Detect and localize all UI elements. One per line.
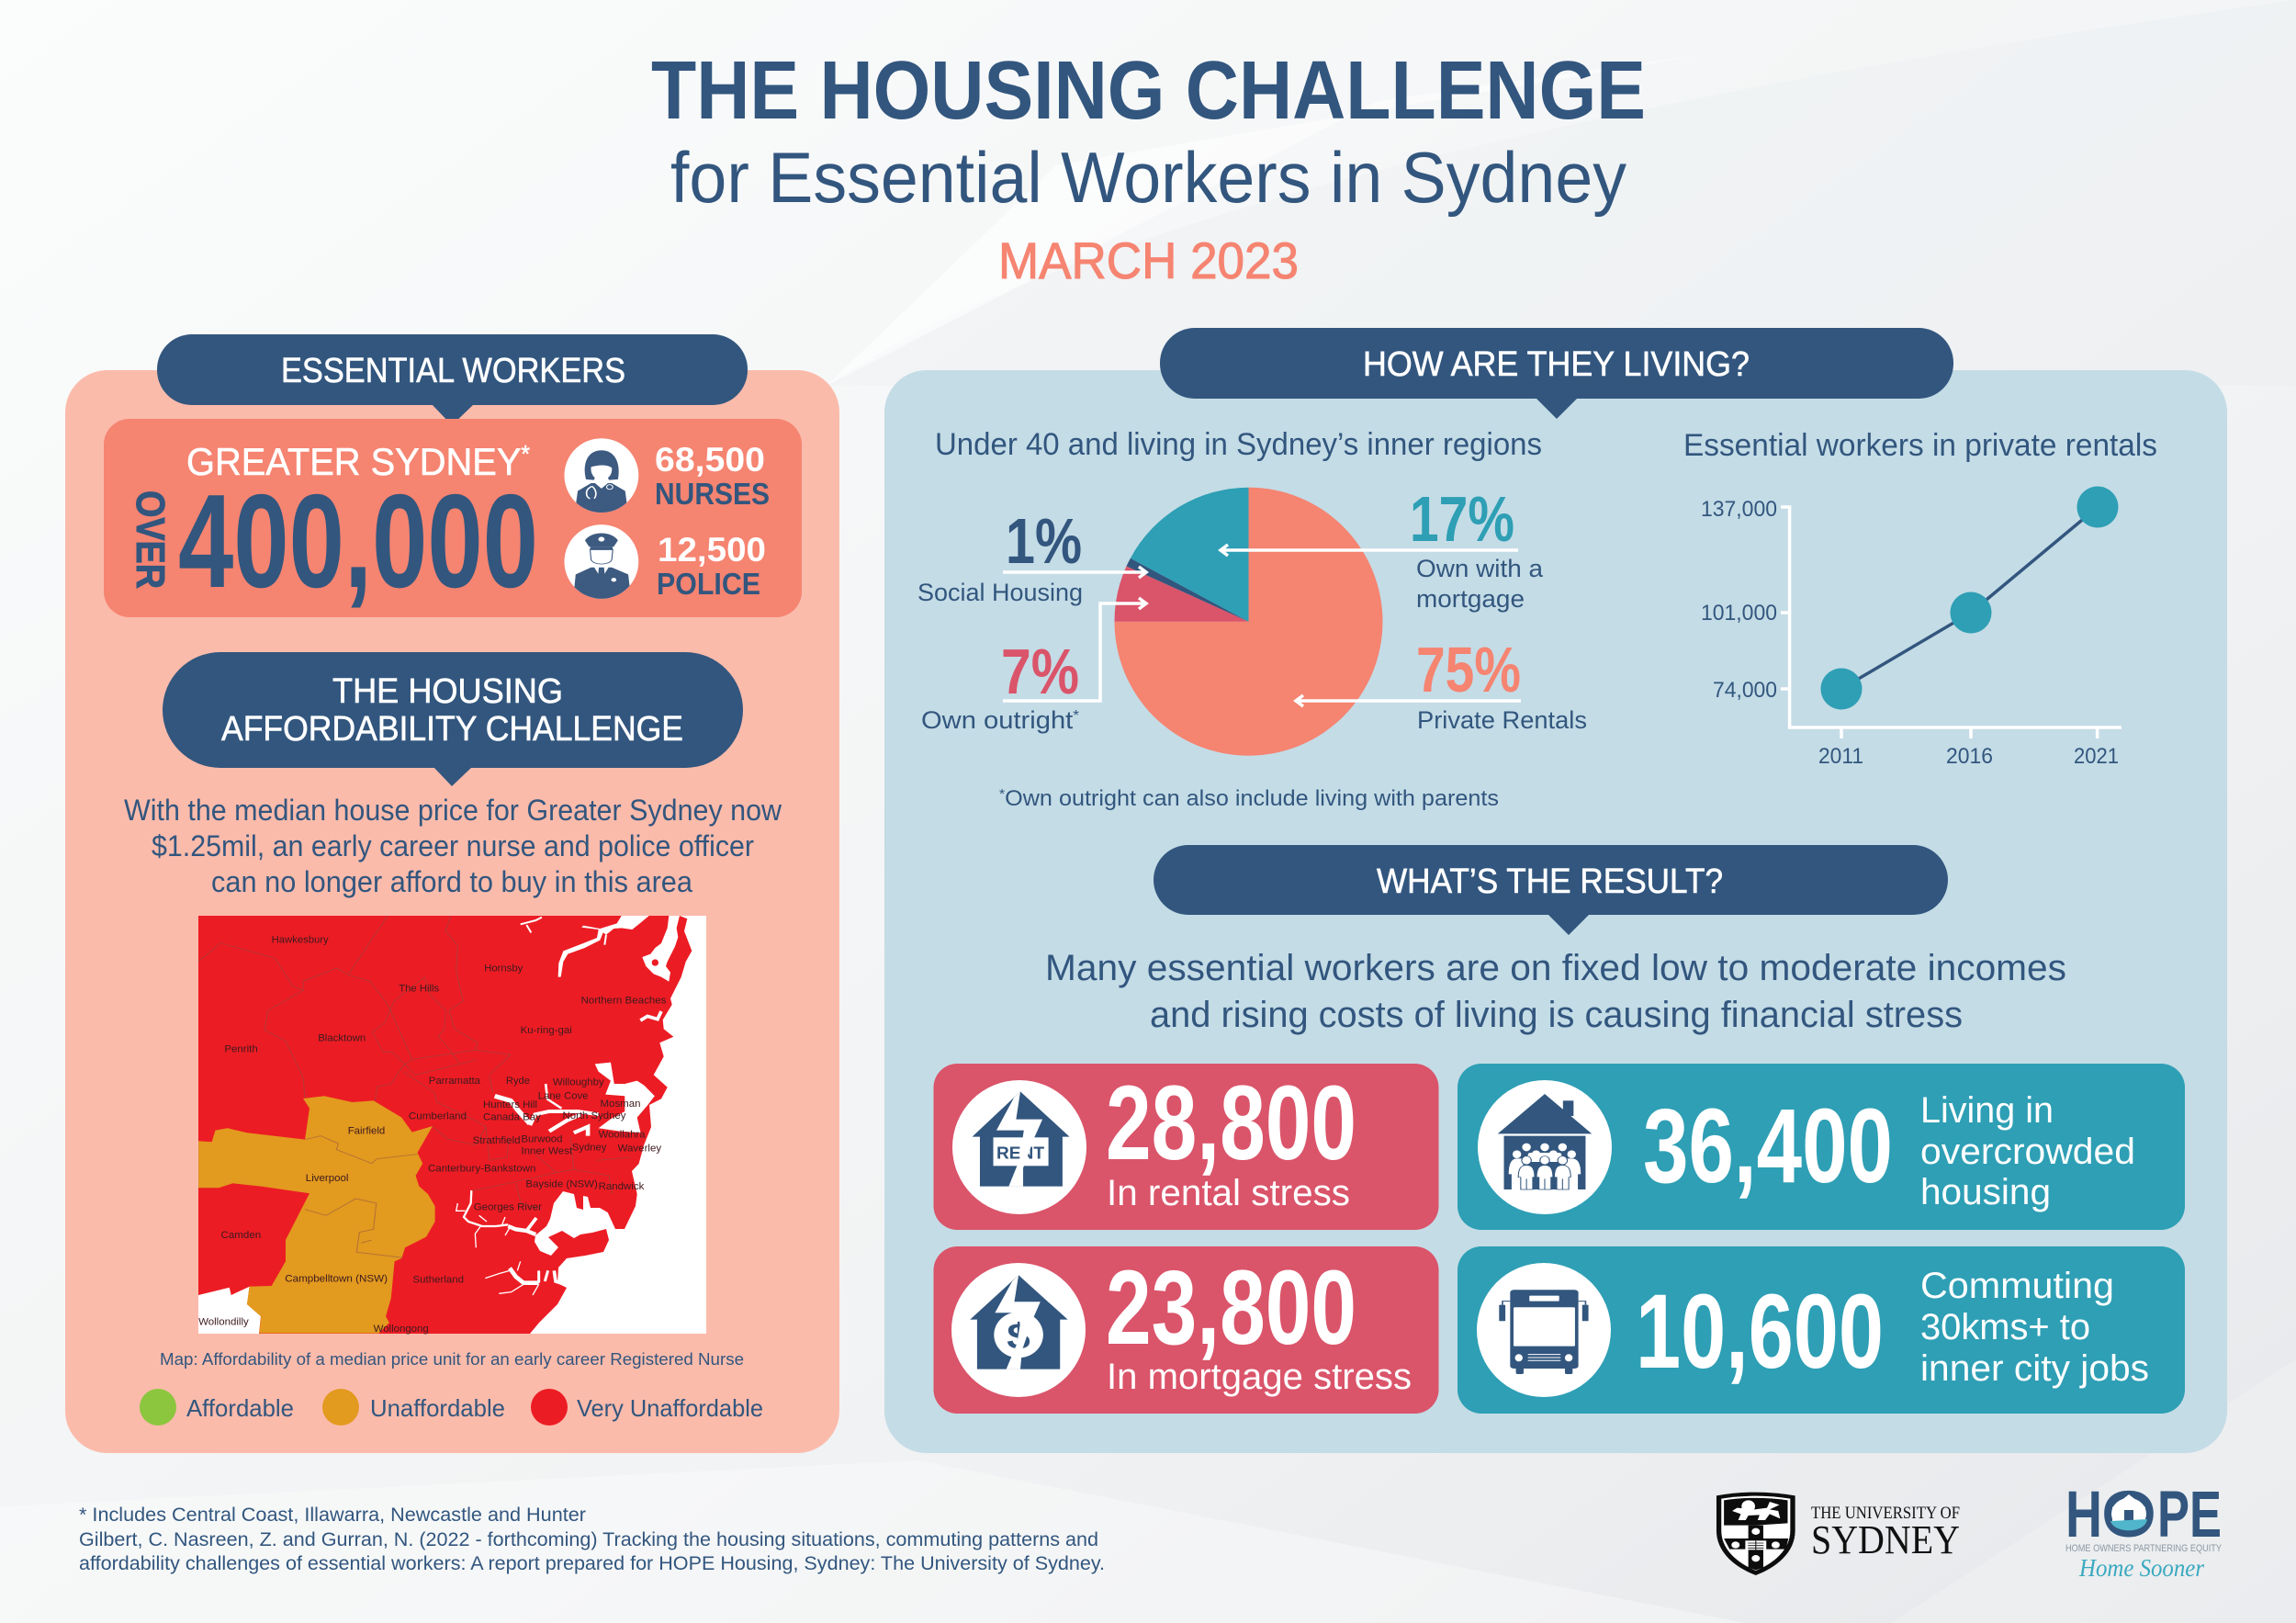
axes: [1781, 507, 2122, 738]
map labels: Penrith: [224, 1043, 258, 1054]
stat box: greater sydney workers: [104, 419, 802, 617]
panel: how are they living and the result: [884, 328, 2227, 1453]
map labels: Camden: [221, 1229, 261, 1241]
map labels: Burwood: [521, 1133, 563, 1144]
big number 400,000: 400,000: [178, 467, 538, 615]
label: 17% own with a mortgage: Own with a: [1416, 555, 1544, 582]
heading: what's the result: [1154, 845, 1948, 935]
text block: median house price: With the median house price for Greater Sydney now: [124, 794, 782, 827]
label: 17% own with a mortgage: [1410, 483, 1544, 613]
footnote: own outright: Own outright can also include living with parents: [1005, 786, 1499, 811]
map labels: Northern Beaches: [580, 994, 667, 1006]
label: commuting: [1920, 1266, 2149, 1389]
legend: affordable: Affordable: [186, 1394, 294, 1422]
nurses count: 68,500: [655, 441, 765, 479]
map labels: Lane Cove: [538, 1089, 589, 1101]
map labels: Canterbury-Bankstown: [428, 1162, 535, 1174]
map labels: Mosman: [600, 1098, 641, 1110]
stat card: overcrowded housing: [1458, 1064, 2185, 1230]
icon: broken rent house: [973, 1091, 1070, 1187]
map labels: Fairfield: [348, 1124, 385, 1136]
legend: affordable: [140, 1389, 294, 1426]
map labels: Parramatta: [429, 1075, 480, 1087]
map: housing affordability by local government area: [198, 916, 706, 1335]
x axis labels: 2021: [2074, 744, 2119, 769]
logo: the university of sydney: SYDNEY: [1811, 1517, 1960, 1562]
label: living in overcrowded housing: overcrowded: [1920, 1132, 2135, 1172]
icon: crowded house: [1498, 1094, 1592, 1189]
number 23,800: 23,800: [1106, 1249, 1356, 1367]
map labels: Wollondilly: [198, 1315, 249, 1327]
number 10,600: 10,600: [1636, 1273, 1884, 1391]
slice: social housing 1%: [1126, 558, 1249, 622]
heading: how are they living: HOW ARE THEY LIVING?: [1363, 345, 1750, 384]
footnote: own outright: *: [999, 786, 1005, 802]
heading: the housing challenge: THE HOUSING CHALLENGE: [651, 45, 1646, 137]
stat card: rental stress: [933, 1064, 1438, 1230]
x axis labels: 2016: [1946, 744, 1993, 769]
chart heading: under 40: Under 40 and living in Sydney’s inner regions: [935, 427, 1542, 462]
legend: unaffordable: [322, 1389, 505, 1426]
text block: median house price: can no longer afford to buy in this area: [211, 865, 692, 898]
map labels: Campbelltown (NSW): [285, 1272, 388, 1284]
map labels: Liverpool: [306, 1172, 348, 1184]
wordmark hope: [2065, 1479, 2222, 1551]
map labels: North Sydney: [563, 1110, 626, 1121]
legend: very unaffordable: Very Unaffordable: [577, 1394, 763, 1422]
map labels: Hawkesbury: [272, 933, 329, 945]
label: 7% own outright: [921, 636, 1079, 734]
label: commuting: inner city jobs: [1920, 1348, 2149, 1389]
label: living in overcrowded housing: housing: [1920, 1172, 2051, 1212]
footnotes and reference: Gilbert, C. Nasreen, Z. and Gurran, N. (2022 - forthcoming) Tracking the housing situations, commuting patterns and: [79, 1529, 1098, 1550]
logo: the university of sydney: [1716, 1493, 1960, 1575]
very unaffordable land: [198, 916, 692, 1334]
map labels: Ryde: [506, 1075, 530, 1087]
panel: essential workers and affordability: [65, 334, 839, 1453]
heading: how are they living: [1160, 328, 1953, 419]
shield: [1716, 1493, 1795, 1575]
chart heading: private rentals: Essential workers in private rentals: [1683, 428, 2157, 463]
stat card: long commutes: [1458, 1246, 2185, 1414]
icon: bus: [1499, 1290, 1589, 1374]
heading: essential workers: [157, 334, 748, 425]
label: living in overcrowded housing: [1920, 1090, 2135, 1212]
label: in mortgage stress: In mortgage stress: [1107, 1357, 1412, 1397]
map labels: Hunters Hill: [483, 1099, 537, 1110]
subheading: for Essential Workers in Sydney: [670, 137, 1626, 218]
wordmark: THE UNIVERSITY OF: [1811, 1504, 1960, 1523]
icon: police officer: [564, 524, 638, 601]
title: [651, 45, 1646, 289]
map labels: Waverley: [618, 1142, 661, 1154]
script: Home Sooner: [2078, 1554, 2204, 1582]
y axis labels: [1701, 497, 1777, 703]
map labels: [198, 933, 667, 1335]
text block: financial stress: Many essential workers are on fixed low to moderate incomes: [1045, 948, 2066, 988]
legend: very unaffordable: [531, 1389, 763, 1426]
map labels: Inner West: [521, 1144, 573, 1156]
icon: broken mortgage house: [970, 1275, 1068, 1369]
greater sydney label: *: [521, 440, 530, 468]
stat card: mortgage stress: [933, 1246, 1438, 1414]
map labels: Sutherland: [413, 1273, 464, 1285]
footnotes and reference: * Includes Central Coast, Illawarra, Newcastle and Hunter: [79, 1505, 586, 1526]
house in hand mark: [2110, 1494, 2147, 1530]
map labels: Blacktown: [318, 1031, 366, 1043]
police count: 12,500: [658, 531, 766, 569]
boundaries: [198, 916, 630, 1257]
label: 7% own outright: 7%: [1001, 636, 1079, 707]
text block: financial stress: [1045, 948, 2066, 1035]
over rotated label: OVER: [128, 490, 173, 589]
harbour and parramatta river: [495, 1063, 655, 1136]
legend: [140, 1389, 763, 1426]
y axis labels: 74,000: [1713, 678, 1777, 703]
map labels: Willoughby: [553, 1076, 604, 1088]
heading: the housing affordability challenge: [163, 652, 743, 786]
unaffordable region and labels: [198, 916, 667, 1335]
map labels: Cumberland: [409, 1110, 467, 1121]
label: 17% own with a mortgage: mortgage: [1416, 585, 1525, 613]
logo: hope: [2065, 1479, 2223, 1582]
data points: [1820, 487, 2118, 709]
text block: financial stress: and rising costs of living is causing financial stress: [1150, 995, 1963, 1035]
footnotes and reference: affordability challenges of essential workers: A report prepared for HOPE Housing, Sydney: The University of Sydney.: [79, 1553, 1105, 1574]
label: 1% social housing: 1%: [1006, 505, 1082, 577]
x axis labels: [1818, 744, 2119, 769]
y axis labels: 101,000: [1701, 601, 1777, 626]
icon: broken mortgage house: $: [1007, 1316, 1030, 1358]
footnotes and reference: [79, 1505, 1105, 1574]
map labels: Randwick: [599, 1180, 644, 1192]
heading: what's the result: WHAT’S THE RESULT?: [1377, 862, 1723, 901]
map caption: Map: Affordability of a median price unit for an early career Registered Nurse: [160, 1350, 744, 1369]
slice: own with a mortgage 17%: [1131, 488, 1249, 622]
label: commuting: 30kms+ to: [1920, 1307, 2090, 1347]
y axis labels: 137,000: [1701, 497, 1777, 522]
heading: the housing affordability challenge: THE HOUSING: [332, 672, 563, 711]
trend line: [1841, 507, 2098, 689]
police label: POLICE: [657, 567, 760, 601]
text block: median house price: $1.25mil, an early career nurse and police officer: [152, 829, 754, 862]
x axis labels: 2011: [1818, 744, 1863, 769]
label: 7% own outright: *: [1073, 708, 1079, 724]
northern water inlets: [521, 916, 680, 1020]
label: living in overcrowded housing: Living in: [1920, 1090, 2054, 1131]
nurses label: NURSES: [655, 477, 770, 511]
slice: private rentals 75%: [1115, 488, 1383, 756]
heading: essential workers: ESSENTIAL WORKERS: [281, 352, 625, 390]
date: MARCH 2023: [998, 231, 1299, 289]
map labels: Sydney: [572, 1141, 606, 1153]
label: 75% private rentals: [1416, 634, 1587, 734]
line chart: essential workers in private rentals: [1701, 487, 2122, 769]
tagline: HOME OWNERS PARTNERING EQUITY: [2065, 1543, 2223, 1554]
number 36,400: 36,400: [1643, 1088, 1893, 1205]
map labels: Ku-ring-gai: [521, 1024, 572, 1036]
map labels: Georges River: [474, 1200, 542, 1212]
label: 1% social housing: Social Housing: [917, 579, 1083, 606]
wordmark hope: H: [2065, 1479, 2102, 1551]
label: 75% private rentals: 75%: [1416, 634, 1521, 705]
arrow: social housing: [1003, 567, 1146, 578]
map labels: Canada Bay: [483, 1110, 541, 1122]
heading: the housing affordability challenge: AFFORDABILITY CHALLENGE: [221, 710, 683, 749]
wordmark hope: O: [2101, 1479, 2156, 1551]
legend: unaffordable: Unaffordable: [370, 1394, 505, 1422]
label: in rental stress: In rental stress: [1107, 1173, 1350, 1213]
map labels: The Hills: [399, 982, 439, 994]
pie chart: housing tenure: [1115, 488, 1383, 756]
greater sydney label: GREATER SYDNEY: [186, 440, 539, 483]
arrow: private rentals: [1296, 695, 1521, 706]
label: 17% own with a mortgage: 17%: [1410, 483, 1514, 555]
arrow: own outright: [1003, 598, 1146, 701]
wordmark hope: PE: [2157, 1479, 2222, 1551]
map labels: Wollongong: [374, 1323, 429, 1335]
northern boundaries: [373, 977, 477, 1075]
map labels: Woollahra: [599, 1128, 646, 1140]
icon: broken rent house: RENT: [996, 1144, 1045, 1163]
label: 7% own outright: Own outright: [921, 706, 1062, 734]
map labels: Bayside (NSW): [525, 1178, 598, 1189]
slice: own outright 7%: [1115, 566, 1249, 622]
label: commuting: Commuting: [1920, 1266, 2114, 1306]
arrow: own with a mortgage: [1221, 545, 1518, 556]
label: 75% private rentals: Private Rentals: [1417, 706, 1587, 734]
georges river and port hacking: [456, 1190, 568, 1295]
map labels: Strathfield: [473, 1134, 521, 1146]
map labels: Hornsby: [484, 962, 523, 974]
label: 1% social housing: [917, 505, 1083, 606]
text block: median house price: [124, 794, 782, 898]
number 28,800: 28,800: [1106, 1065, 1356, 1182]
icon: nurse: [564, 438, 638, 513]
